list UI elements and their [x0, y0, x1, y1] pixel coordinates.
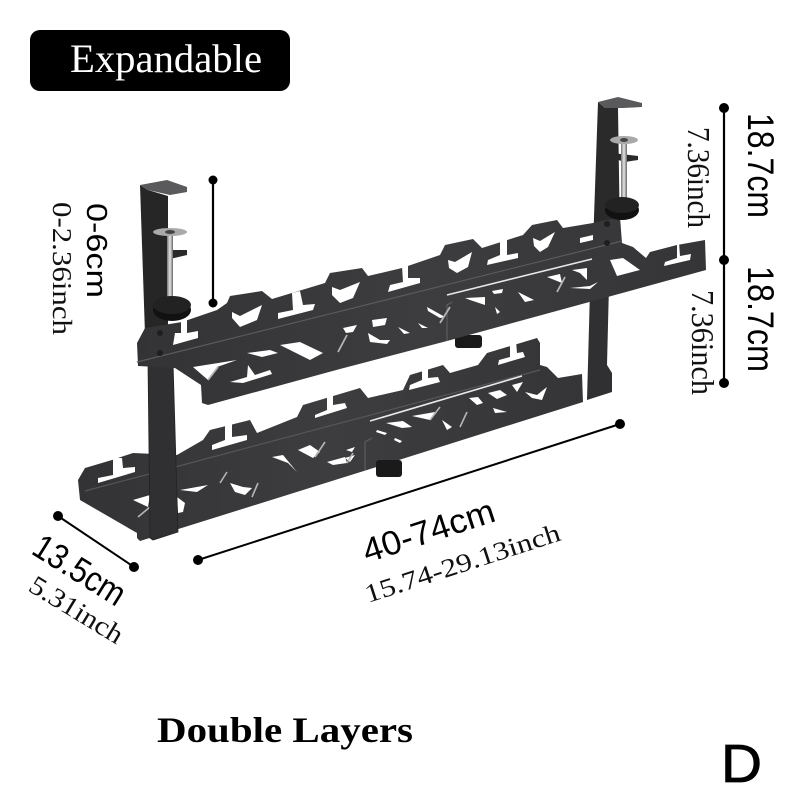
lower tray	[78, 338, 583, 541]
dimension: depth 13.5cm: 5.31inch	[24, 570, 130, 650]
lower tray adjustment knob	[376, 460, 402, 477]
rack product illustration	[78, 97, 706, 541]
title badge: Expandable	[30, 30, 290, 91]
lower tray slots and cutouts	[98, 341, 547, 513]
dimension: heights 18.7cm + 18.7cm	[681, 103, 781, 395]
dimension: heights 18.7cm + 18.7cm: 18.7cm	[740, 113, 781, 218]
dimension: heights 18.7cm + 18.7cm: 7.36inch	[685, 290, 721, 395]
right lower upright	[587, 285, 612, 400]
caption: Double Layers: Double Layers	[157, 710, 413, 750]
left lower upright	[148, 362, 178, 540]
left clamp screw and knob	[153, 228, 191, 321]
dimension: heights 18.7cm + 18.7cm: 18.7cm	[740, 266, 781, 372]
dimension: depth 13.5cm	[24, 511, 139, 650]
right clamp screw and knob	[603, 136, 639, 220]
upper tray knob	[455, 335, 482, 348]
dimension: clamp range 0-6cm	[47, 176, 218, 336]
dimension: clamp range 0-6cm: 0-6cm	[80, 203, 112, 298]
upper tray slots and cutouts	[173, 232, 691, 383]
upper tray rail slit	[447, 259, 592, 295]
dimension: width 40-74cm: 40-74cm	[358, 492, 500, 571]
left upper upright with clamp	[140, 180, 187, 334]
dimension: width 40-74cm	[193, 419, 625, 609]
dimension: width 40-74cm: 15.74-29.13inch	[361, 518, 564, 609]
dimension: heights 18.7cm + 18.7cm: 7.36inch	[681, 127, 717, 228]
upper tray	[137, 217, 706, 405]
lower tray rail slit	[370, 376, 522, 421]
dimension: clamp range 0-6cm: 0-2.36inch	[47, 202, 77, 336]
title badge: Expandable: Expandable	[70, 36, 262, 81]
dimension: depth 13.5cm: 13.5cm	[26, 527, 133, 614]
variant letter D: D	[721, 734, 762, 794]
right upper upright with clamp	[593, 97, 642, 246]
